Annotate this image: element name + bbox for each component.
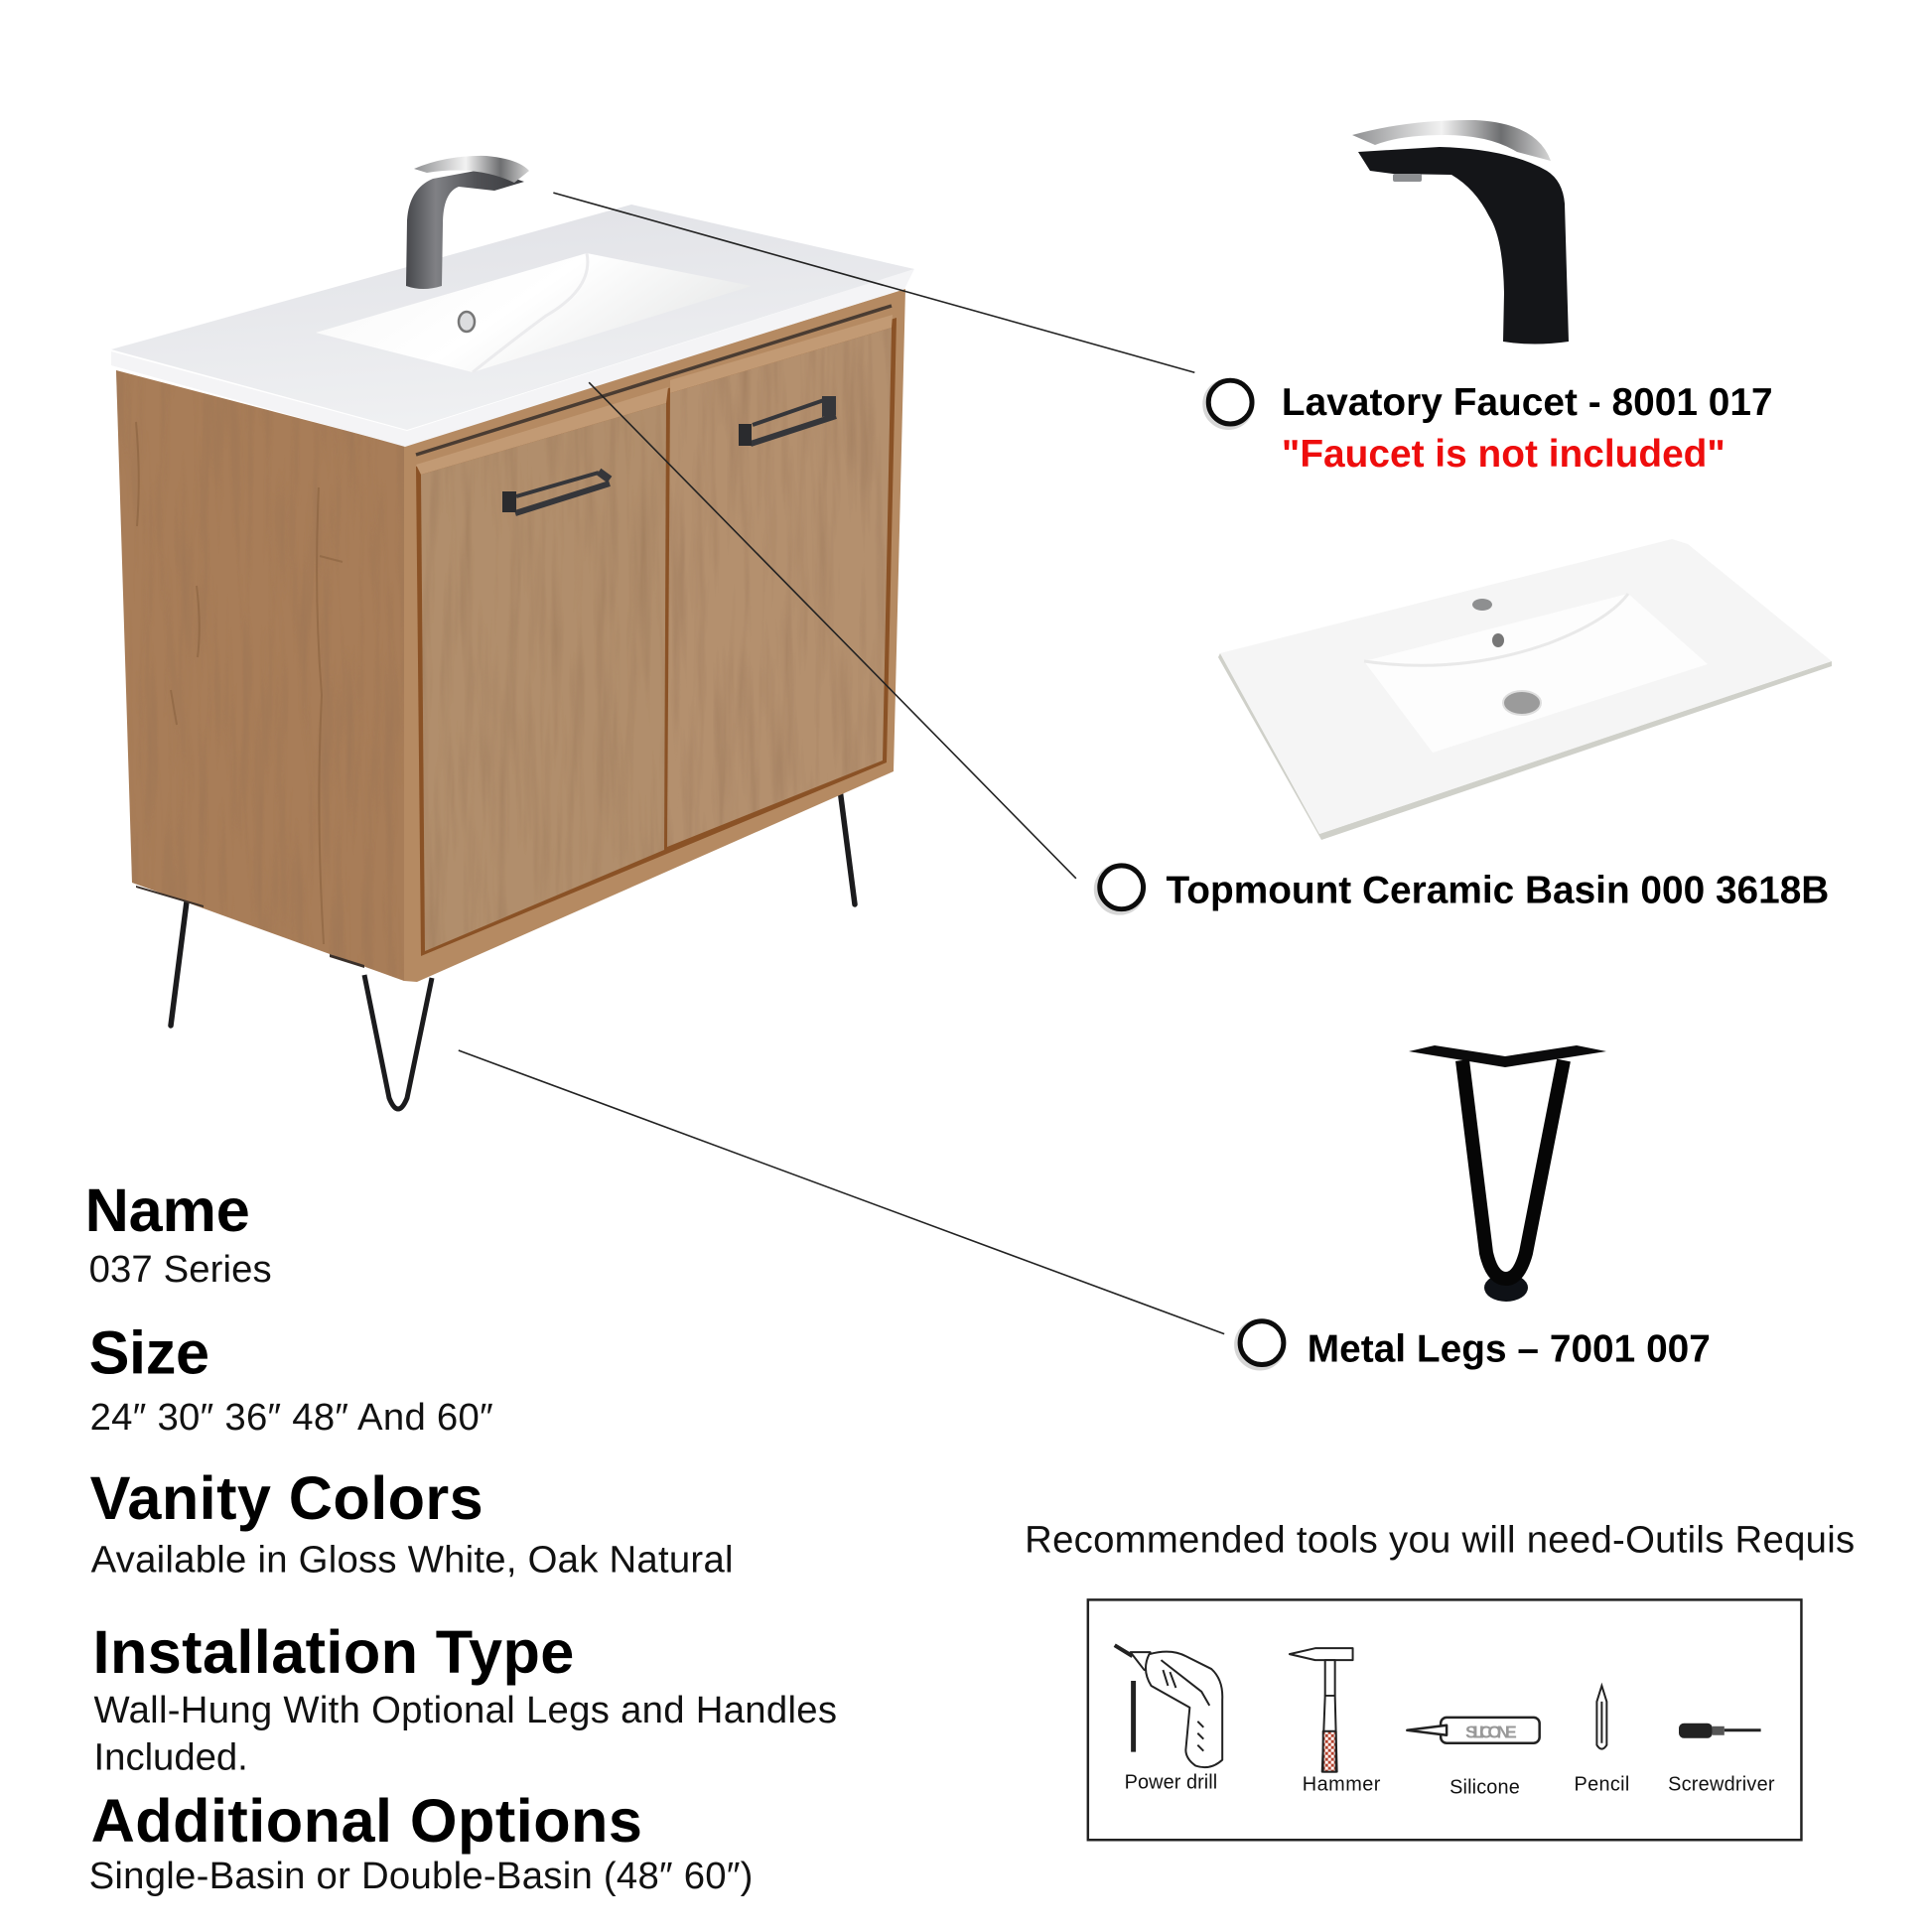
recess shadow line	[416, 318, 897, 956]
icon: power drill	[1115, 1645, 1222, 1767]
left door top lip	[416, 387, 668, 475]
faucet hole	[1472, 599, 1492, 611]
label: legs: Metal Legs – 7001 007	[1308, 1328, 1711, 1371]
back-left leg	[171, 901, 187, 1026]
value: installation line 1: Wall-Hung With Optional Legs and Handles	[94, 1689, 837, 1731]
icon: silicone tube	[1407, 1718, 1540, 1743]
icon: screwdriver	[1679, 1724, 1761, 1738]
bowl inner shadow	[1364, 594, 1628, 665]
drain	[1503, 691, 1541, 715]
label: silicone: Silicone	[1449, 1776, 1520, 1798]
basin top	[1220, 539, 1832, 834]
marker ring: faucet	[1204, 380, 1252, 428]
heading: size: Size	[89, 1318, 209, 1386]
icon: hammer	[1290, 1648, 1353, 1772]
faucet aerator	[1393, 174, 1422, 182]
mounting plate	[1409, 1045, 1606, 1067]
product specifications	[85, 1176, 837, 1897]
cabinet front frame	[404, 289, 905, 982]
black faucet product photo	[1352, 120, 1569, 344]
metal leg product photo	[1409, 1045, 1606, 1302]
value: sizes: 24″ 30″ 36″ 48″ And 60″	[90, 1396, 493, 1439]
heading: installation type: Installation Type	[93, 1618, 574, 1686]
cabinet side panel	[116, 370, 404, 981]
sink bowl	[316, 253, 752, 372]
hairpin rods	[1462, 1060, 1564, 1279]
tools panel	[1088, 1599, 1801, 1840]
front hairpin leg	[364, 975, 432, 1109]
ceramic basin product photo	[1218, 539, 1832, 840]
bowl curved wall	[473, 253, 588, 372]
heading: vanity colors: Vanity Colors	[90, 1464, 483, 1532]
vanity product photo	[111, 156, 914, 1109]
marker ring: basin	[1096, 866, 1144, 913]
right door top lip	[670, 315, 893, 393]
countertop surface	[111, 205, 914, 430]
value: options: Single-Basin or Double-Basin (48″ 60″)	[89, 1855, 753, 1897]
value: installation line 2: Included.	[94, 1736, 248, 1779]
tools heading: Recommended tools you will need-Outils Requis	[1025, 1519, 1855, 1562]
side panel base blocks	[136, 886, 364, 968]
right door handle	[739, 396, 836, 446]
side panel knots and cracks	[136, 422, 343, 944]
value: name: 037 Series	[89, 1248, 272, 1291]
label: pencil: Pencil	[1575, 1773, 1629, 1795]
left door handle	[502, 472, 610, 513]
overflow hole	[459, 312, 475, 332]
faucet chrome lever	[414, 156, 529, 183]
top dark rail	[416, 306, 892, 455]
basin thickness	[1218, 653, 1832, 840]
countertop edge	[111, 269, 914, 447]
heading: name: Name	[85, 1176, 250, 1244]
label: faucet: Lavatory Faucet - 8001 017	[1282, 381, 1773, 424]
back-right leg	[840, 789, 855, 904]
panel border	[1088, 1599, 1801, 1840]
leader line: legs	[459, 1050, 1224, 1334]
icon: pencil	[1596, 1686, 1606, 1749]
label: hammer: Hammer	[1303, 1773, 1381, 1795]
overflow	[1492, 633, 1504, 647]
chrome lever	[1352, 120, 1551, 161]
label: power drill: Power drill	[1125, 1771, 1217, 1793]
right door	[667, 328, 892, 847]
label: screwdriver: Screwdriver	[1668, 1773, 1775, 1795]
value: colors: Available in Gloss White, Oak Natural	[91, 1539, 734, 1582]
rubber foot	[1484, 1274, 1528, 1302]
basin bowl	[1364, 594, 1708, 753]
note: faucet not included: "Faucet is not included"	[1282, 433, 1725, 476]
leader line: basin	[589, 382, 1076, 879]
faucet body black	[1358, 147, 1569, 344]
leader line: faucet	[553, 193, 1194, 372]
label: basin: Topmount Ceramic Basin 000 3618B	[1166, 870, 1829, 912]
heading: additional options: Additional Options	[91, 1787, 642, 1855]
left door	[421, 403, 666, 951]
faucet body	[406, 169, 524, 289]
icon: silicone tube: SILICONE	[1465, 1723, 1517, 1742]
marker ring: legs	[1236, 1321, 1284, 1368]
